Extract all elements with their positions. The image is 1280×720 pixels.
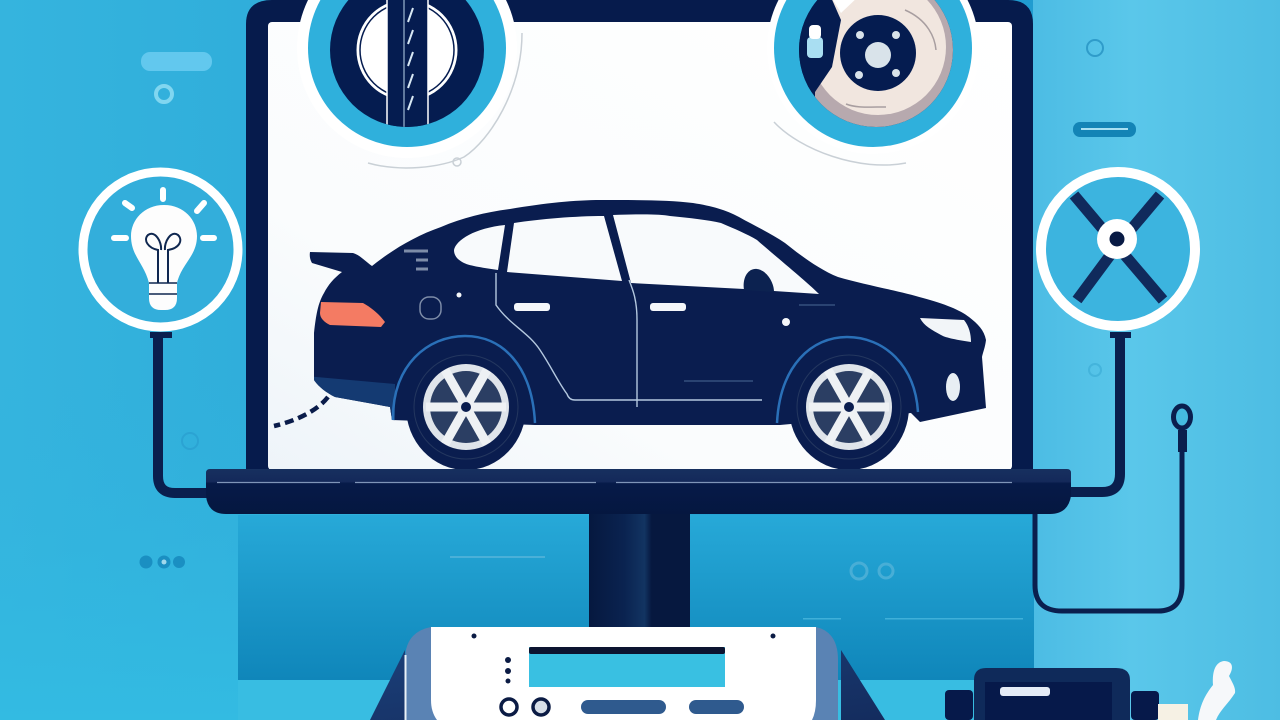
fog light	[946, 373, 960, 401]
wheel cross badge	[1041, 172, 1195, 326]
monitor screen	[268, 22, 1012, 470]
door handles	[456, 292, 790, 326]
head light	[920, 318, 971, 342]
device pill buttons	[581, 700, 744, 714]
diagnostic device	[370, 627, 885, 720]
wheels	[408, 413, 909, 469]
body creases	[684, 305, 835, 381]
device display	[529, 647, 725, 687]
side mirror	[744, 269, 774, 292]
device round buttons	[501, 699, 549, 715]
fuel cap and vents	[404, 251, 441, 319]
wire: left connector	[150, 332, 210, 493]
monitor base bar	[206, 469, 1071, 514]
door lines	[496, 273, 762, 407]
icon: lightbulb	[114, 190, 214, 310]
device outer shell	[405, 627, 838, 720]
decorative dots and marks	[140, 433, 1023, 620]
device side wedges	[370, 650, 885, 720]
rear wheel	[414, 355, 518, 459]
cream block and white figure	[1158, 661, 1235, 720]
front wheel	[797, 355, 901, 459]
top-left tire badge	[297, 0, 522, 168]
car windows	[454, 214, 819, 294]
wire: far right probe	[1035, 406, 1190, 611]
top-right brake disc badge	[767, 0, 979, 165]
lightbulb badge	[83, 172, 238, 327]
car illustration	[274, 200, 986, 470]
tail light	[320, 302, 385, 327]
device face	[431, 627, 816, 720]
monitor frame	[246, 0, 1033, 470]
small dark box device	[945, 668, 1159, 720]
device indicator dots	[472, 634, 776, 684]
decorative left pill and ring	[141, 52, 212, 102]
device shell edge line	[404, 655, 406, 720]
wire: right connector	[1068, 332, 1131, 492]
icon: cross spokes	[1074, 195, 1163, 300]
decorative right pill and rings	[1073, 40, 1136, 376]
back panel behind stand	[238, 515, 1034, 680]
wheel arches	[393, 336, 918, 423]
car body	[310, 200, 986, 425]
monitor stand	[589, 512, 690, 630]
exhaust dashed line	[274, 397, 328, 426]
rear bumper shading	[314, 376, 395, 420]
